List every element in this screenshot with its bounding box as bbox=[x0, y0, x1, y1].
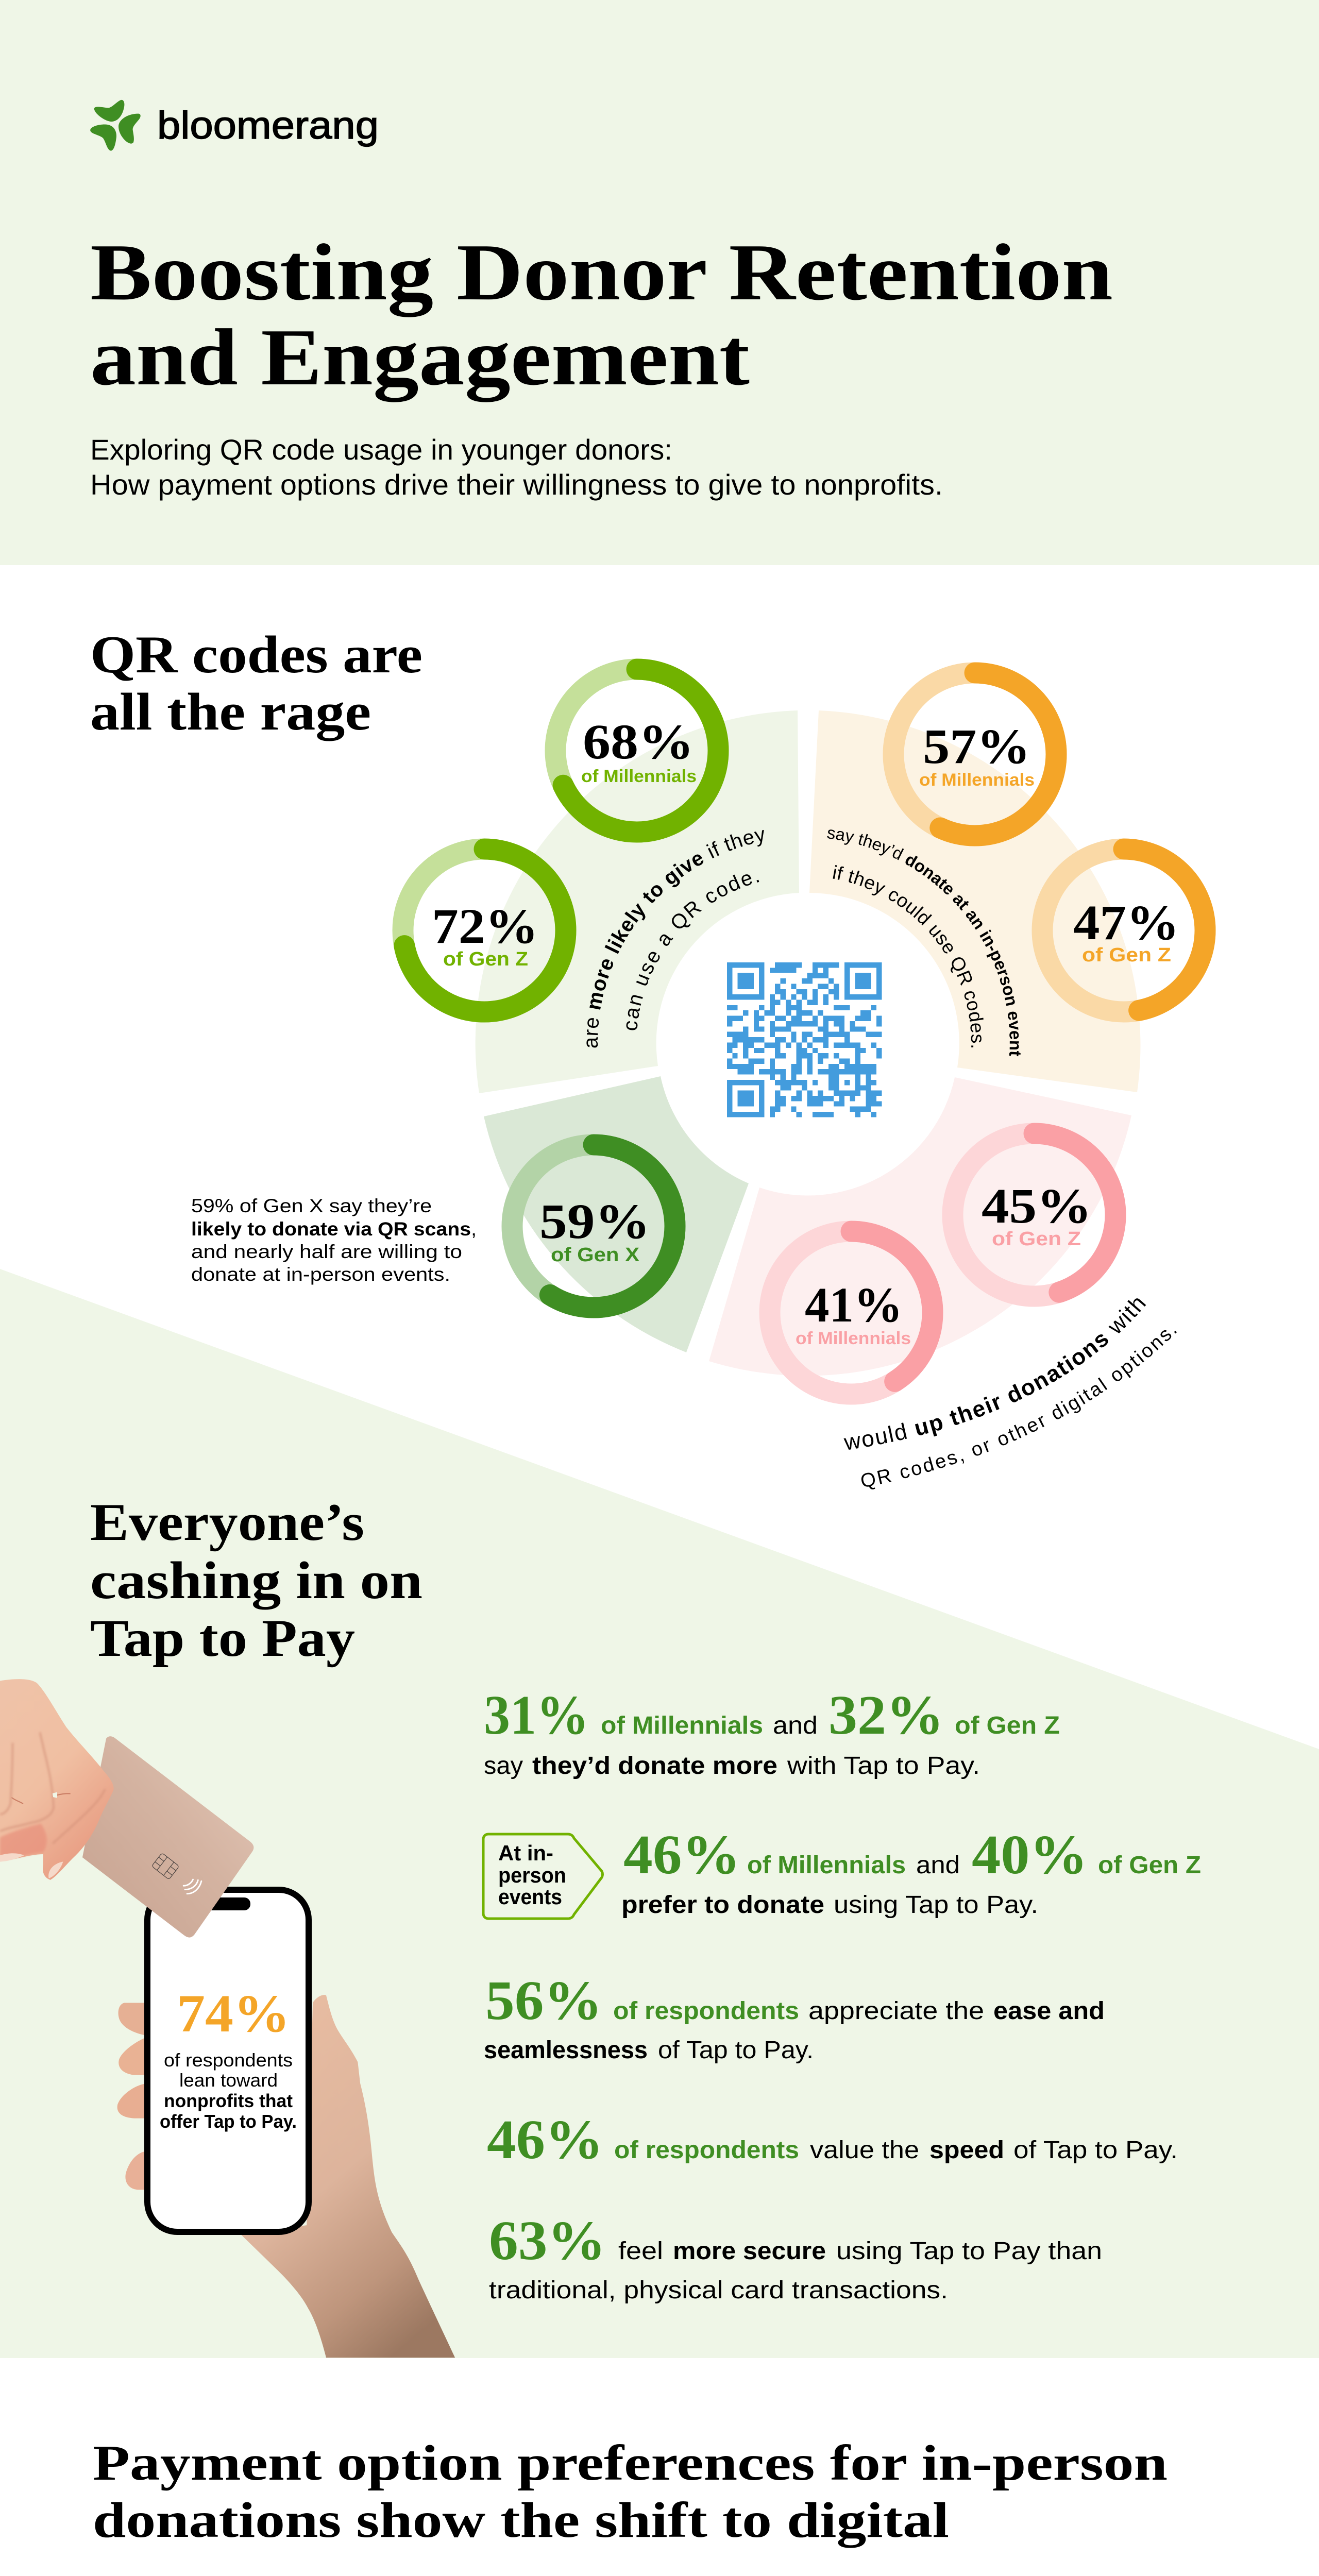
curved text: donate at in-person event: if they could use QR codes. bbox=[833, 865, 984, 1047]
text block: Gen X note: and nearly half are willing to bbox=[191, 1241, 462, 1262]
title: Boosting Donor Retention bbox=[90, 227, 1113, 317]
stat: 31% of Millennials and 32% of Gen Z: they’d donate more bbox=[532, 1752, 777, 1780]
stat: 56% of respondents: of respondents bbox=[613, 1997, 799, 2025]
phone body bbox=[147, 1890, 309, 2232]
stat: 74% bbox=[160, 1984, 297, 2132]
stat: 31% of Millennials and 32% of Gen Z: 32% bbox=[828, 1685, 944, 1746]
stat: 46% of respondents bbox=[487, 2109, 1178, 2171]
stat: 31% of Millennials and 32% of Gen Z: with Tap to Pay. bbox=[787, 1752, 980, 1780]
donut: 41% of Millennials: 41% bbox=[805, 1277, 903, 1332]
stat: 74%: 74% bbox=[177, 1984, 290, 2043]
stat: 46% of respondents: value the bbox=[810, 2137, 919, 2164]
card chip bbox=[151, 1853, 179, 1879]
stat: 46% of Millennials and 40% of Gen Z: 46% bbox=[623, 1824, 740, 1886]
donut: 41% of Millennials: of Millennials bbox=[796, 1329, 911, 1348]
title bbox=[90, 227, 1113, 402]
badge: At in-person events: person bbox=[498, 1863, 566, 1887]
heading: Everyone's cashing in on Tap to Pay bbox=[90, 1493, 422, 1668]
stat: 63% feel more secure: more secure bbox=[673, 2238, 826, 2265]
stat: 46% of respondents: speed bbox=[929, 2137, 1004, 2164]
stat: 31% of Millennials and 32% of Gen Z bbox=[484, 1685, 1060, 1780]
stat: 63% feel more secure: using Tap to Pay than bbox=[836, 2238, 1102, 2265]
curved text: more likely to give: can use a QR code. bbox=[627, 874, 759, 1030]
heading: payment option preferences: Payment option preferences for in-person bbox=[93, 2435, 1168, 2491]
subtitle: How payment options drive their willingness to give to nonprofits. bbox=[90, 468, 943, 501]
title: and Engagement bbox=[90, 312, 750, 402]
stat: 46% of Millennials and 40% of Gen Z: prefer to donate bbox=[621, 1891, 824, 1919]
logo: bloomerang bbox=[90, 100, 379, 151]
logo wordmark: bloomerang bbox=[157, 104, 379, 147]
stat: 74%: nonprofits that bbox=[164, 2090, 293, 2111]
illustration: hand holding phone bbox=[0, 1679, 455, 2358]
donut: 68% of Millennials: of Millennials bbox=[581, 767, 697, 786]
donut: 59% of Gen X: 59% bbox=[539, 1194, 650, 1249]
donut: 47% of Gen Z bbox=[1042, 849, 1205, 1012]
stat: 31% of Millennials and 32% of Gen Z: of Millennials bbox=[601, 1712, 763, 1739]
panel: orange fan sector bbox=[809, 710, 1140, 1092]
text block: Gen X note: 59% of Gen X say they’re bbox=[191, 1195, 432, 1216]
curved text: more likely to give: are more likely to give if they bbox=[586, 829, 764, 1048]
donut: 72% of Gen Z bbox=[403, 849, 566, 1012]
contactless card bbox=[82, 1736, 253, 1938]
heading: payment option preferences: donations show the shift to digital bbox=[93, 2493, 949, 2548]
text block: Gen X note: donate at in-person events. bbox=[191, 1264, 450, 1285]
curved text: donate at in-person event: say they’d donate at an in-person event bbox=[827, 829, 1021, 1056]
heading: QR codes: all the rage bbox=[90, 683, 371, 741]
text block: Gen X note: likely to donate via QR scans , bbox=[191, 1218, 477, 1240]
stat: 31% of Millennials and 32% of Gen Z: of Gen Z bbox=[955, 1712, 1060, 1739]
stat: 56% of respondents: appreciate the bbox=[808, 1997, 984, 2025]
donut: 72% of Gen Z: of Gen Z bbox=[443, 948, 528, 970]
badge: At in-person events: events bbox=[498, 1885, 562, 1909]
panel: dark green fan sector bbox=[484, 1076, 749, 1352]
stat: 74%: lean toward bbox=[179, 2070, 278, 2091]
subtitle: Exploring QR code usage in younger donors: bbox=[90, 433, 672, 466]
phone notch bbox=[201, 1897, 250, 1910]
panel: green fan sector bbox=[476, 710, 799, 1093]
heading: Everyone's cashing in on Tap to Pay: Tap to Pay bbox=[90, 1609, 355, 1668]
donut: 45% of Gen Z: 45% bbox=[982, 1178, 1092, 1233]
stat: 63% feel more secure: feel bbox=[618, 2238, 663, 2265]
subtitle bbox=[90, 433, 943, 501]
curved text: up their donations: QR codes, or other digital options. bbox=[861, 1330, 1177, 1489]
stat: 63% feel more secure: traditional, physical card transactions. bbox=[489, 2277, 948, 2304]
contactless waves bbox=[183, 1879, 201, 1894]
donut: 68% of Millennials bbox=[555, 669, 718, 832]
panel: Tap to Pay background bbox=[0, 1269, 1319, 2358]
donut: 47% of Gen Z: of Gen Z bbox=[1082, 944, 1171, 966]
stat: 46% of respondents: of Tap to Pay. bbox=[1013, 2137, 1178, 2164]
heading: Everyone's cashing in on Tap to Pay: cashing in on bbox=[90, 1551, 422, 1610]
donut: 57% of Millennials: of Millennials bbox=[919, 770, 1035, 790]
donut: 57% of Millennials: 57% bbox=[923, 719, 1030, 774]
stat: 63% feel more secure bbox=[489, 2210, 1102, 2304]
stat: 46% of respondents: of respondents bbox=[614, 2137, 799, 2164]
curved text: up their donations: would up their donations with bbox=[843, 1298, 1146, 1450]
badge: At in-person events bbox=[483, 1834, 603, 1919]
badge: At in-person events: At in- bbox=[498, 1841, 553, 1865]
heading: QR codes bbox=[90, 625, 422, 741]
hand gripping phone bbox=[117, 1995, 455, 2358]
stat: 46% of Millennials and 40% of Gen Z: and bbox=[916, 1852, 960, 1879]
heading: QR codes: QR codes are bbox=[90, 625, 422, 684]
stat: 56% of respondents: 56% bbox=[485, 1970, 602, 2031]
stat: 31% of Millennials and 32% of Gen Z: say bbox=[484, 1752, 523, 1780]
donut: 41% of Millennials bbox=[770, 1231, 933, 1394]
panel: pink fan sector bbox=[709, 1077, 1131, 1376]
donut: 59% of Gen X: of Gen X bbox=[551, 1244, 640, 1266]
panel: header background bbox=[0, 0, 1319, 565]
stat: 46% of Millennials and 40% of Gen Z: of Millennials bbox=[747, 1852, 906, 1879]
stat: 46% of Millennials and 40% of Gen Z: 40% bbox=[972, 1824, 1088, 1886]
donut: 57% of Millennials bbox=[893, 673, 1056, 836]
stat: 56% of respondents: ease and bbox=[993, 1997, 1105, 2025]
stat: 63% feel more secure: 63% bbox=[489, 2210, 606, 2272]
donut: 47% of Gen Z: 47% bbox=[1073, 895, 1179, 950]
stat: 46% of Millennials and 40% of Gen Z: of Gen Z bbox=[1098, 1852, 1201, 1879]
text block: Gen X note bbox=[191, 1195, 477, 1285]
stat: 31% of Millennials and 32% of Gen Z: and bbox=[773, 1712, 818, 1739]
icon: QR code bbox=[727, 962, 882, 1117]
stat: 31% of Millennials and 32% of Gen Z: 31% bbox=[484, 1685, 589, 1746]
stat: 74%: offer Tap to Pay. bbox=[160, 2111, 297, 2132]
heading: Everyone's cashing in on Tap to Pay: Everyone’s bbox=[90, 1493, 364, 1552]
donut: 45% of Gen Z bbox=[953, 1133, 1115, 1296]
stat: 56% of respondents: of Tap to Pay. bbox=[658, 2037, 814, 2064]
heading: payment option preferences bbox=[93, 2435, 1168, 2548]
stat: 46% of Millennials and 40% of Gen Z: using Tap to Pay. bbox=[834, 1891, 1038, 1919]
donut: 72% of Gen Z: 72% bbox=[432, 899, 538, 954]
stat: 46% of respondents: 46% bbox=[487, 2109, 603, 2171]
donut: 59% of Gen X bbox=[512, 1145, 675, 1308]
icon: logo leaves bbox=[90, 100, 141, 151]
donut: 68% of Millennials: 68% bbox=[583, 714, 694, 769]
donut: 45% of Gen Z: of Gen Z bbox=[992, 1228, 1081, 1250]
hand holding card bbox=[0, 1679, 114, 1880]
stat: 74%: of respondents bbox=[164, 2049, 293, 2071]
stat: 56% of respondents: seamlessness bbox=[484, 2037, 648, 2064]
stat: 56% of respondents bbox=[484, 1970, 1105, 2064]
stat: 46% of Millennials and 40% of Gen Z bbox=[621, 1824, 1201, 1919]
